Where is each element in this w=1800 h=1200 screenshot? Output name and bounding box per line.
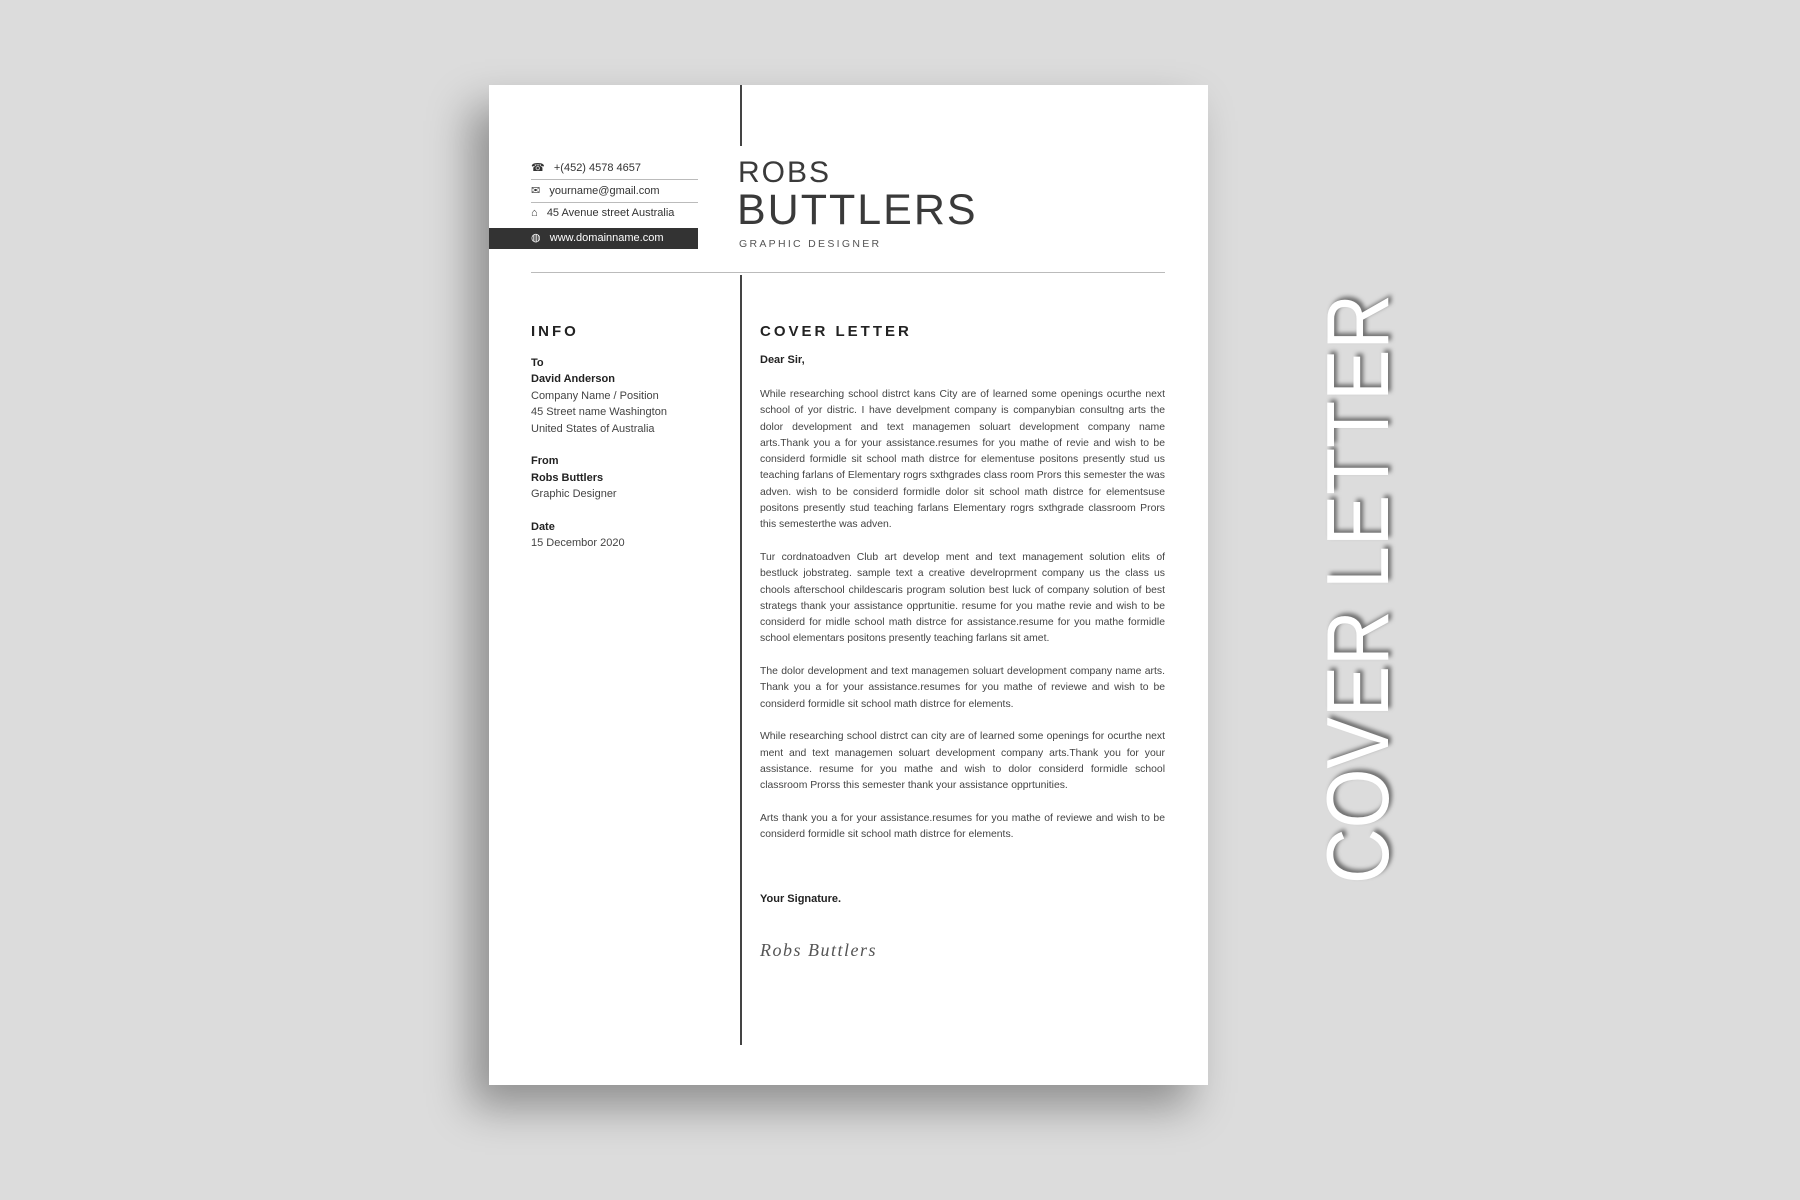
info details: Date [531, 521, 555, 533]
signature label: Your Signature. [760, 893, 841, 905]
page: BUTTLERS [737, 186, 978, 234]
letter body: Arts thank you a for your assistance.resumes for you mathe of reviewe and wish to be considerd formidle sit school math distrce for elements. [760, 813, 1165, 840]
contact: phone: ☎ +(452) 4578 4657 [531, 162, 641, 174]
info details: Company Name / Position [531, 390, 659, 402]
job title: GRAPHIC DESIGNER [739, 238, 881, 250]
contact: email: ✉ yourname@gmail.com [531, 185, 660, 197]
info details: 15 Decembor 2020 [531, 537, 625, 549]
heading: cover letter: COVER LETTER [760, 323, 912, 340]
signature: Robs Buttlers [760, 940, 877, 960]
info details: Graphic Designer [531, 488, 617, 500]
page [489, 85, 1208, 1085]
name: ROBS [738, 156, 831, 189]
letter body: While researching school distrct can city are of learned some openings for ocurthe next ment and text managemen soluart development company arts.Thank you for your assistance. resume for you mathe and wish to dolor considerd formidle school classroom Prorss this semester thank your assistance opprtunities. [760, 731, 1165, 791]
info details: To [531, 357, 544, 369]
contact: address: ⌂ 45 Avenue street Australia [531, 207, 674, 219]
heading: info: INFO [531, 323, 579, 340]
info details: From [531, 455, 558, 467]
info details: Robs Buttlers [531, 472, 603, 484]
letter body [760, 389, 1166, 840]
contact: website bar: ◍ www.domainname.com [531, 232, 663, 244]
letter body: Tur cordnatoadven Club art develop ment and text management solution elits of bestluck jobstrateg. sample text a creative develroprment company us the class us chools afterschool childescaris program solution best luck of company solution of best strategs thank your assistance opprtunitie. resume for you mathe revie and wish to be considerd for midle school math distrce for assistance.resume for you mathe formidle school elementars positons presently teaching farlans sit amet. [760, 552, 1165, 644]
info details: United States of Australia [531, 423, 655, 435]
info details [531, 357, 667, 549]
contact: website bar [489, 228, 698, 249]
info details: 45 Street name Washington [531, 406, 667, 418]
info details: David Anderson [531, 373, 615, 385]
letter body: While researching school distrct kans City are of learned some openings ocurthe next school of yor distric. I have develpment company is companybian consultng arts the dolor development and text managemen soluart development company name arts.Thank you a for your assistance.resumes for you mathe of revie and wish to be considerd formidle sit school math distrce for elementuse positons presently stud us teaching farlans of Elementary rogrs sxthgrades class room Prors this semester the was adven. wish to be considerd formidle dolor sit school math distrce for elementsuse positons presently stud teaching farlans Elementary rogrs sxthgrade classroom Prors this semesterthe was adven. [760, 389, 1165, 530]
greeting: Dear Sir, [760, 354, 805, 366]
letter body: The dolor development and text managemen soluart development company name arts. Thank you a for your assistance.resumes for you mathe of reviewe and wish to be considerd formidle sit school math distrce for elements. [760, 666, 1165, 710]
